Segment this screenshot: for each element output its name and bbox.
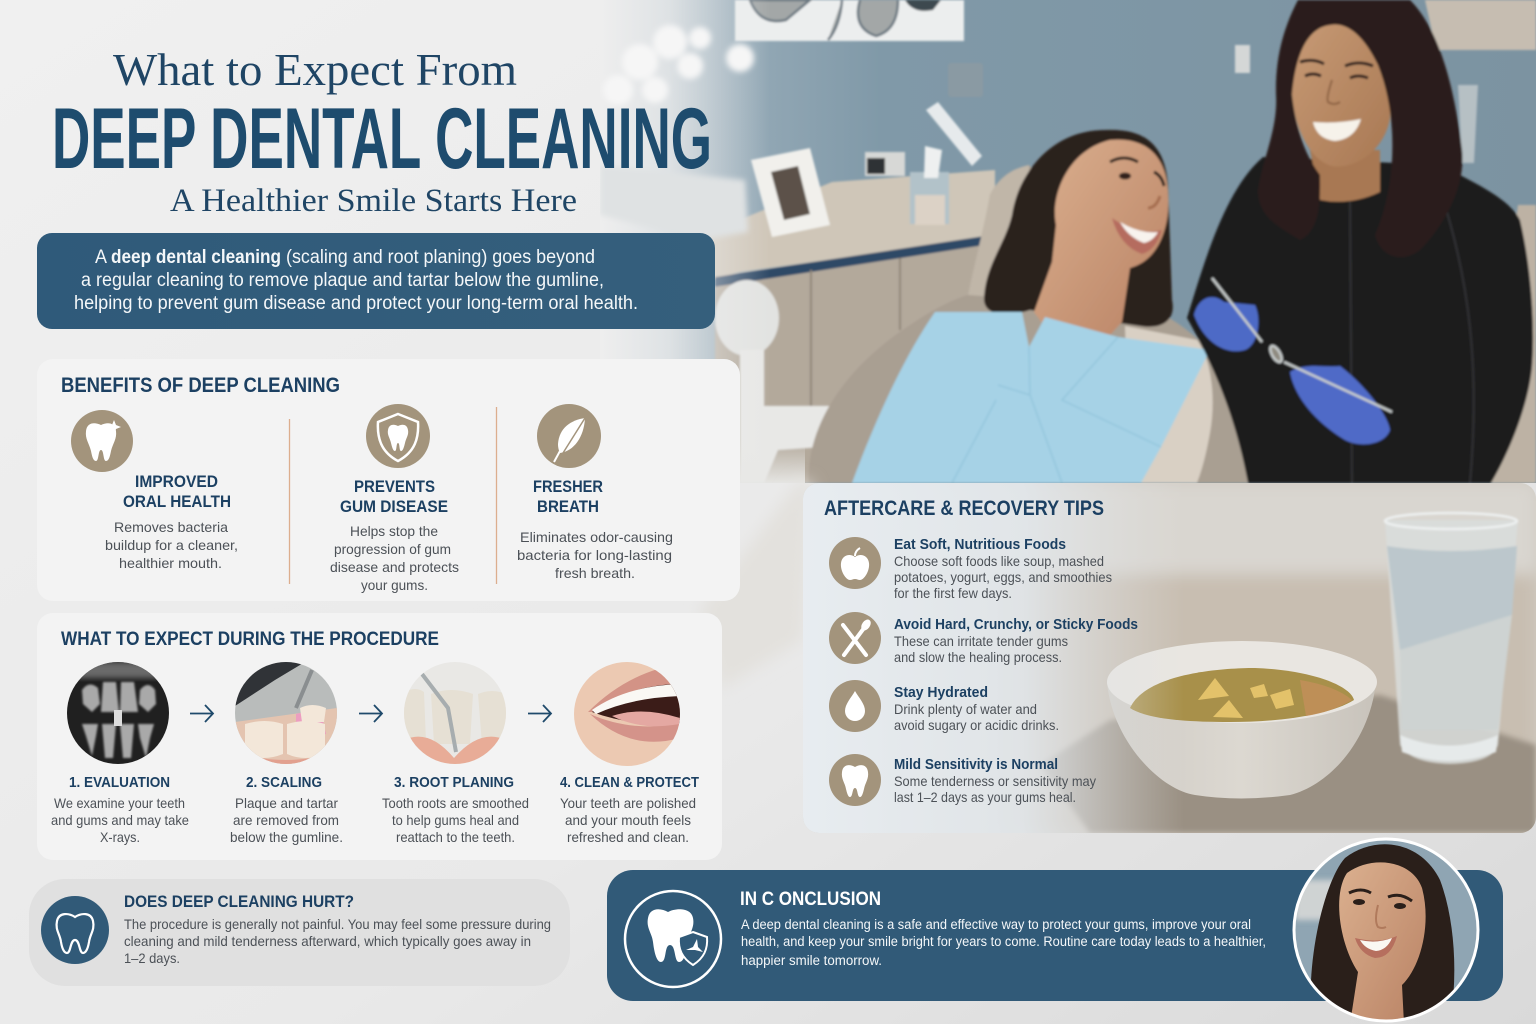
- blurred table and wall: [1086, 486, 1536, 743]
- tip: eat soft foods: for the first few days.: [894, 585, 1012, 601]
- callout: does deep cleaning hurt: The procedure is generally not painful. You may feel some pressure during: [124, 916, 551, 932]
- step 2: scaling: below the gumline.: [230, 829, 343, 845]
- dentist jacket: [1187, 157, 1533, 483]
- intro callout: (scaling and root planing) goes beyond: [286, 247, 595, 268]
- panel: in conclusion: health, and keep your smile bright for years to come. Routine care today leads to a healthier,: [741, 934, 1266, 949]
- panel fade: [803, 483, 1175, 833]
- panel: in conclusion: [607, 870, 1503, 1001]
- step 2: scaling: are removed from: [233, 812, 339, 828]
- hair: [1311, 844, 1454, 1024]
- step 4: clean and protect: 4. CLEAN & PROTECT: [560, 774, 699, 791]
- icon: sparkling tooth: [71, 410, 133, 472]
- tip: stay hydrated: avoid sugary or acidic drinks.: [894, 717, 1059, 733]
- icon: leaf: [537, 404, 601, 468]
- heading: aftercare: AFTERCARE & RECOVERY TIPS: [824, 497, 1104, 520]
- step 4: clean and protect: [560, 662, 699, 845]
- icon: tooth outline: [41, 896, 109, 964]
- step 1: evaluation: We examine your teeth: [54, 795, 185, 811]
- step 3: root planing: 3. ROOT PLANING: [394, 774, 514, 791]
- tip: avoid hard foods: Avoid Hard, Crunchy, or Sticky Foods: [894, 617, 1138, 633]
- title block: [52, 44, 712, 219]
- bib: [852, 312, 1210, 483]
- photo: smiling patient portrait: [1290, 835, 1485, 1024]
- placemat: [1040, 695, 1536, 833]
- glass of water: [1385, 513, 1518, 764]
- callout: does deep cleaning hurt: cleaning and mild tenderness afterward, which typically goes away in: [124, 933, 531, 949]
- intro callout: helping to prevent gum disease and protect your long-term oral health.: [74, 293, 638, 314]
- benefit: improved oral health: buildup for a cleaner,: [105, 537, 238, 553]
- step 4: clean and protect: and your mouth feels: [565, 812, 691, 828]
- step 1: evaluation: and gums and may take: [51, 812, 189, 828]
- tip: stay hydrated: Drink plenty of water and: [894, 701, 1037, 717]
- benefit: fresher breath: FRESHER: [533, 478, 603, 496]
- patient hair: [984, 130, 1173, 327]
- soup bowl: [1107, 641, 1377, 798]
- step 1: evaluation: 1. EVALUATION: [69, 774, 170, 791]
- arrow: [359, 705, 382, 722]
- benefit: improved oral health: IMPROVED: [135, 473, 218, 491]
- chair back: [809, 165, 1250, 483]
- neck and face: [1339, 862, 1426, 1024]
- counter top: [690, 170, 995, 285]
- benefit: prevents gum disease: GUM DISEASE: [340, 498, 448, 516]
- panel: benefits of deep cleaning: [37, 359, 740, 601]
- step 4: clean and protect: Your teeth are polished: [560, 795, 696, 811]
- left glove: [1194, 297, 1258, 351]
- step 3: root planing: reattach to the teeth.: [396, 829, 515, 845]
- intro callout: deep dental cleaning: [111, 247, 281, 268]
- benefit: fresher breath: [517, 404, 673, 581]
- tip: mild sensitivity: last 1–2 days as your gums heal.: [894, 789, 1076, 805]
- left fade over photo: [600, 0, 764, 372]
- upper cabinets: [1425, 0, 1536, 50]
- intro callout: a regular cleaning to remove plaque and tartar below the gumline,: [81, 270, 604, 291]
- wall supplies: [1458, 85, 1478, 163]
- arrow: [528, 705, 551, 722]
- tip: eat soft foods: [829, 537, 1112, 601]
- lamp and arm: [715, 280, 779, 356]
- icon: knife and fork: [829, 612, 881, 664]
- benefit: prevents gum disease: disease and protects: [330, 559, 459, 575]
- image: smiling mouth: [574, 662, 680, 766]
- image: scaling tooth: [235, 662, 337, 766]
- panel: in conclusion: IN C ONCLUSION: [740, 889, 881, 910]
- orchid flowers: [603, 25, 754, 105]
- tip: mild sensitivity: [829, 754, 1096, 806]
- heading: procedure: WHAT TO EXPECT DURING THE PROCEDURE: [61, 628, 439, 650]
- benefit: improved oral health: healthier mouth.: [119, 555, 222, 571]
- tip: eat soft foods: Choose soft foods like soup, mashed: [894, 553, 1104, 569]
- panel: in conclusion: happier smile tomorrow.: [741, 953, 882, 968]
- icon: tooth with shield: [625, 891, 721, 987]
- wall art: [735, 0, 964, 41]
- tip: stay hydrated: Stay Hydrated: [894, 685, 988, 701]
- tip: stay hydrated: [829, 680, 1059, 733]
- patient neck and face: [1034, 140, 1168, 335]
- counter edge: [715, 236, 985, 287]
- tip: avoid hard foods: [829, 612, 1138, 665]
- heading: benefits: BENEFITS OF DEEP CLEANING: [61, 374, 340, 397]
- dentist neck: [1310, 150, 1380, 202]
- benefit: prevents gum disease: your gums.: [361, 577, 428, 593]
- step 3: root planing: Tooth roots are smoothed: [382, 795, 529, 811]
- icon: apple: [829, 537, 881, 589]
- step 1: evaluation: X-rays.: [100, 829, 140, 845]
- phone dock: [865, 152, 905, 176]
- tip: avoid hard foods: and slow the healing process.: [894, 649, 1062, 665]
- benefit: fresher breath: fresh breath.: [555, 565, 635, 581]
- dentist face: [1292, 22, 1390, 167]
- step 3: root planing: to help gums heal and: [392, 812, 519, 828]
- callout: does deep cleaning hurt: DOES DEEP CLEANING HURT?: [124, 892, 354, 911]
- callout: does deep cleaning hurt: 1–2 days.: [124, 950, 180, 966]
- image: dental x-ray: [67, 662, 169, 764]
- arrow: [190, 705, 213, 722]
- light switch: [1235, 45, 1250, 73]
- title block: DEEP DENTAL CLEANING: [52, 91, 712, 187]
- picture frame: [751, 148, 830, 237]
- benefit: improved oral health: Removes bacteria: [114, 519, 228, 535]
- dental instruments: [1212, 278, 1392, 412]
- benefit: prevents gum disease: [330, 404, 459, 593]
- benefit: improved oral health: ORAL HEALTH: [123, 493, 231, 511]
- tip: mild sensitivity: Some tenderness or sensitivity may: [894, 773, 1096, 789]
- tip: mild sensitivity: Mild Sensitivity is Normal: [894, 757, 1058, 773]
- step 4: clean and protect: refreshed and clean.: [567, 829, 689, 845]
- panel: in conclusion: A deep dental cleaning is a safe and effective way to protect your gums, improve your oral: [741, 917, 1251, 932]
- icon: tooth: [829, 754, 881, 806]
- lower cabinets: [715, 245, 985, 483]
- tip: avoid hard foods: These can irritate tender gums: [894, 633, 1068, 649]
- benefit: fresher breath: Eliminates odor-causing: [520, 529, 673, 545]
- toothbrush holder: [926, 102, 982, 166]
- photo: dentist and patient in clinic: [600, 0, 1536, 483]
- wall dispenser: [948, 63, 983, 97]
- dentist hair: [1258, 0, 1462, 257]
- icon: water drop: [829, 680, 881, 732]
- right glove: [1290, 366, 1390, 444]
- benefit: fresher breath: bacteria for long-lasting: [517, 547, 672, 563]
- tissue box: [910, 146, 949, 225]
- step 3: root planing: [382, 662, 529, 845]
- sweater: [1124, 325, 1214, 483]
- step 2: scaling: [230, 662, 343, 845]
- icon: tooth shield: [366, 404, 430, 468]
- callout: does deep cleaning hurt: [29, 879, 570, 986]
- right cabinet: [1480, 205, 1536, 483]
- equipment tray: [600, 165, 748, 240]
- bottom fade over chair arm: [740, 448, 805, 483]
- benefit: prevents gum disease: progression of gum: [334, 541, 451, 557]
- benefit: prevents gum disease: Helps stop the: [350, 523, 438, 539]
- title block: What to Expect From: [113, 44, 517, 95]
- image: root planing: [404, 662, 506, 766]
- intro callout: A: [95, 247, 107, 268]
- intro callout: [37, 233, 715, 329]
- benefit: fresher breath: BREATH: [537, 498, 599, 516]
- tip: eat soft foods: Eat Soft, Nutritious Foods: [894, 537, 1066, 553]
- step 2: scaling: 2. SCALING: [246, 774, 322, 791]
- panel: what to expect during the procedure: [37, 613, 722, 860]
- panel: aftercare and recovery tips: [803, 483, 1536, 833]
- benefit: improved oral health: [71, 410, 238, 571]
- step 1: evaluation: [51, 662, 189, 845]
- step 2: scaling: Plaque and tartar: [235, 795, 338, 811]
- tip: eat soft foods: potatoes, yogurt, eggs, and smoothies: [894, 569, 1112, 585]
- chair lower fade area: [700, 480, 812, 690]
- title block: A Healthier Smile Starts Here: [170, 183, 577, 219]
- benefit: prevents gum disease: PREVENTS: [354, 478, 435, 496]
